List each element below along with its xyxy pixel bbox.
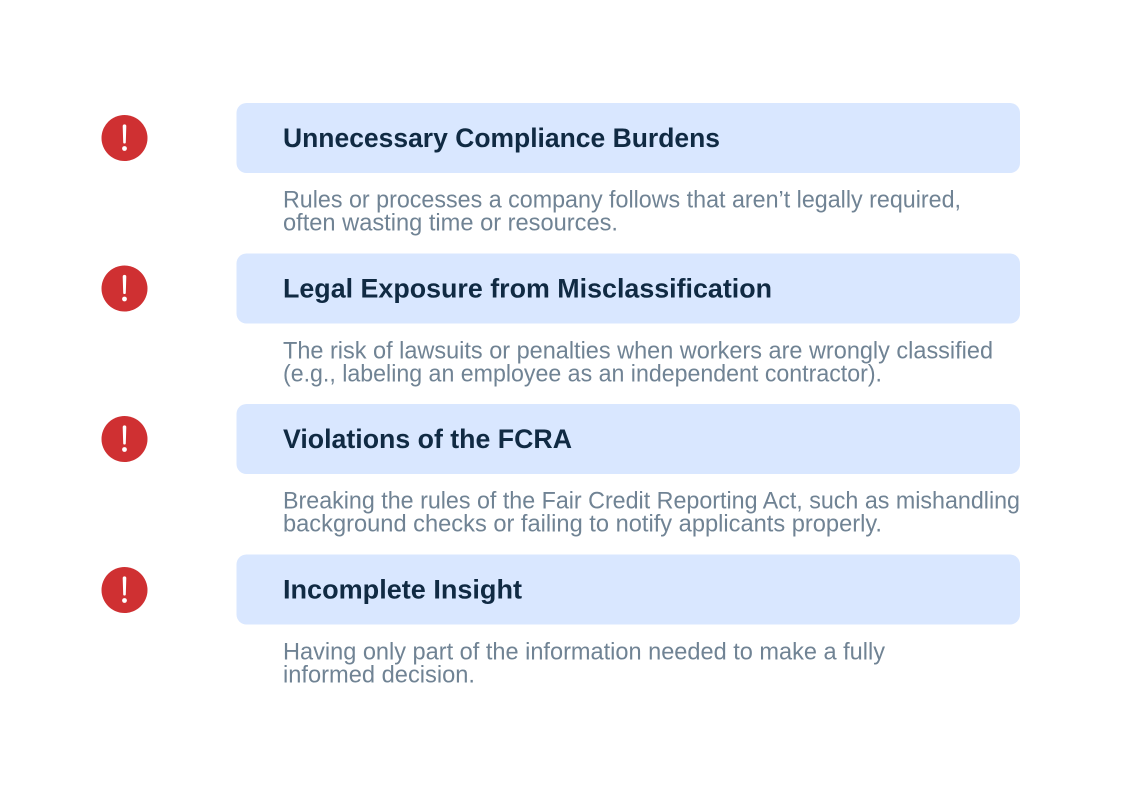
panel: incomplete insight	[102, 554, 1020, 688]
heading: Incomplete Insight	[283, 575, 522, 605]
description	[283, 187, 961, 237]
panel: unnecessary compliance burdens	[102, 103, 1020, 237]
description: Rules or processes a company follows that aren’t legally required,	[283, 187, 961, 214]
panel: violations of the FCRA	[102, 404, 1020, 538]
description	[283, 338, 993, 388]
heading card background	[236, 103, 1020, 173]
heading card background	[236, 554, 1020, 624]
heading: Legal Exposure from Misclassification	[283, 274, 772, 304]
icon: red exclamation circle	[102, 266, 148, 312]
heading: Violations of the FCRA	[283, 424, 572, 454]
description: (e.g., labeling an employee as an independent contractor).	[283, 360, 882, 388]
description: often wasting time or resources.	[283, 210, 618, 237]
description: informed decision.	[283, 662, 475, 688]
description	[283, 488, 1020, 538]
description: background checks or failing to notify applicants properly.	[283, 511, 882, 538]
icon: red exclamation circle	[102, 567, 148, 613]
description: Breaking the rules of the Fair Credit Reporting Act, such as mishandling	[283, 488, 1020, 515]
description: Having only part of the information needed to make a fully	[283, 638, 885, 666]
description: The risk of lawsuits or penalties when workers are wrongly classified	[283, 338, 993, 364]
heading: Unnecessary Compliance Burdens	[283, 123, 720, 153]
icon: red exclamation circle	[102, 416, 148, 462]
description	[283, 638, 885, 688]
heading card background	[236, 404, 1020, 474]
panel: legal exposure from misclassification	[102, 254, 1020, 388]
icon: red exclamation circle	[102, 115, 148, 161]
heading card background	[236, 254, 1020, 324]
